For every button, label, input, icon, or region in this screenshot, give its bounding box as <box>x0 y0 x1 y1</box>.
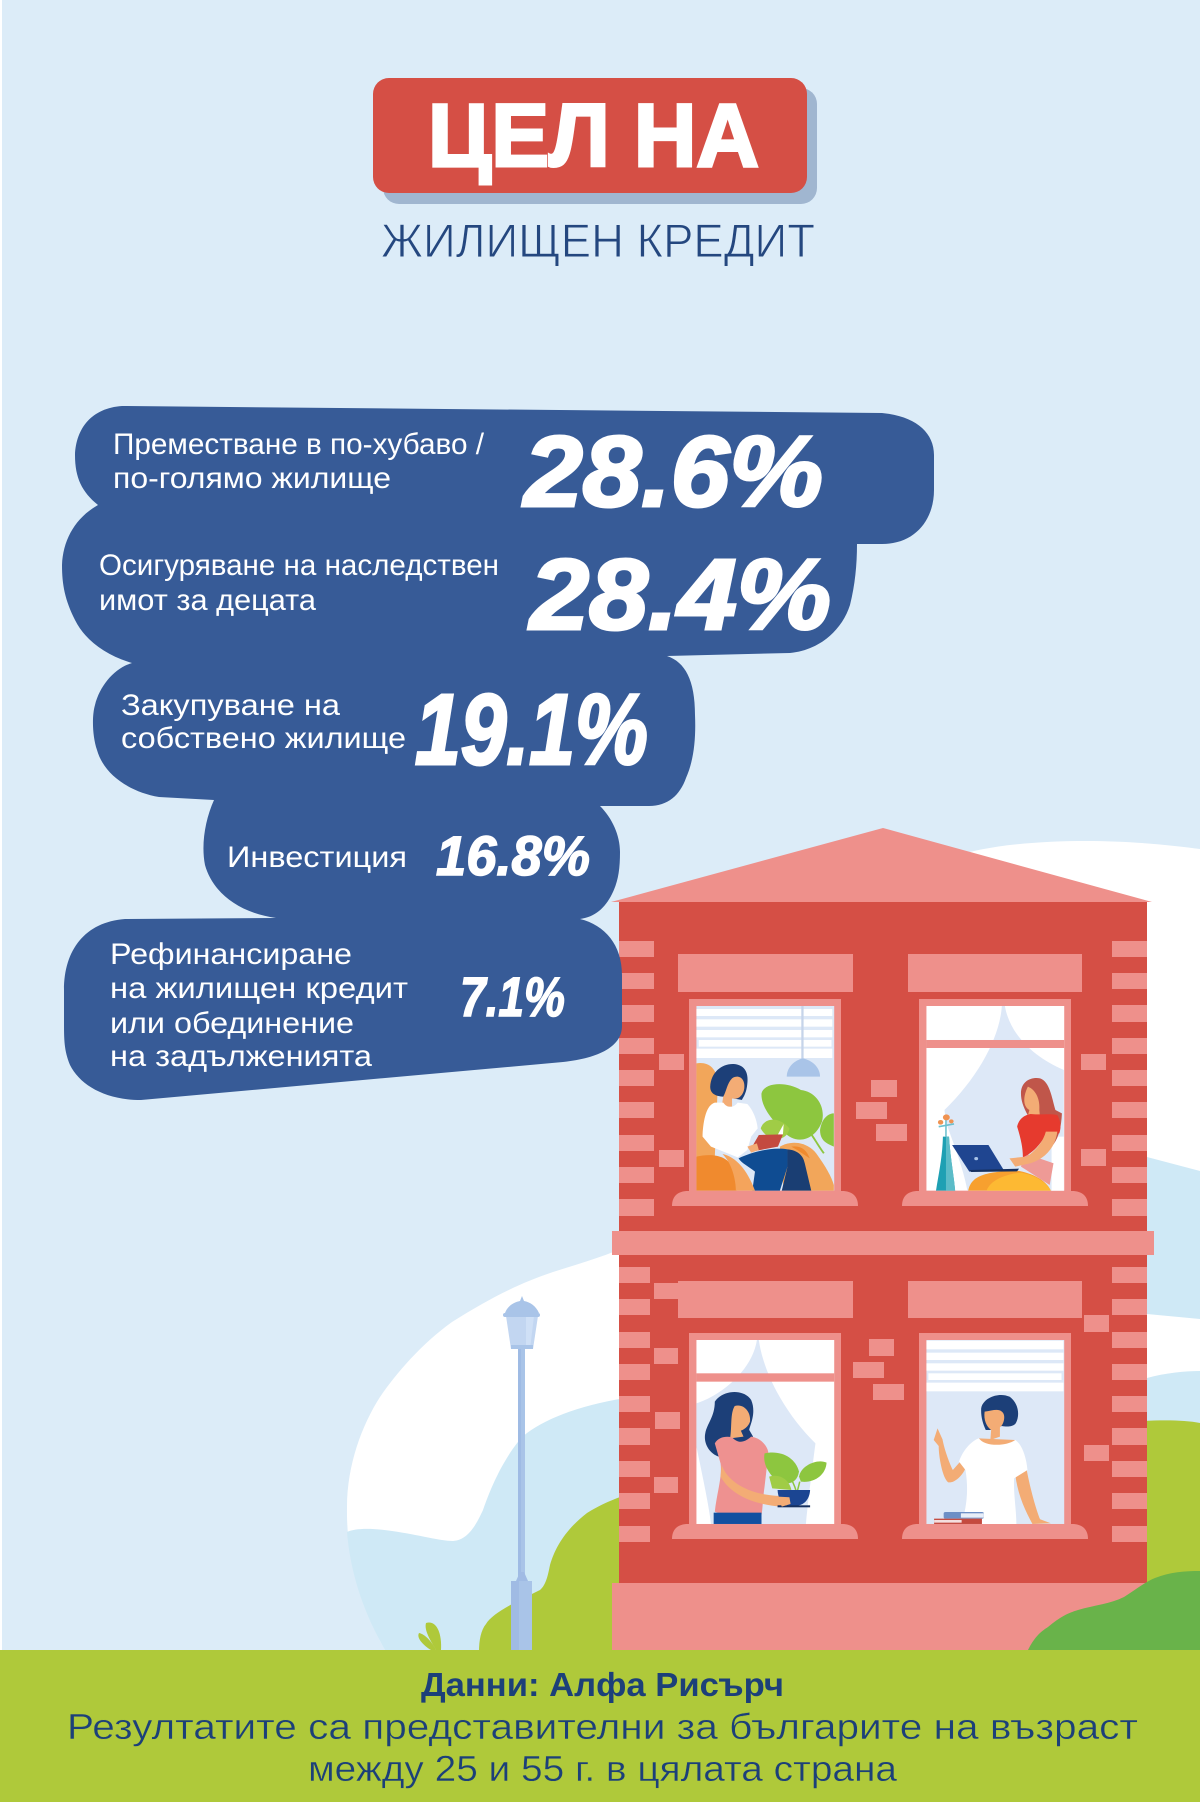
footer <box>0 1650 1200 1802</box>
dark green bush, right <box>1028 1571 1200 1650</box>
neck chest <box>979 1438 1015 1450</box>
note line 1: Резултатите са представителни за българите на възраст <box>67 1706 1138 1747</box>
title text: ЦЕЛ НА <box>428 85 759 185</box>
legs <box>739 1149 788 1191</box>
window frames <box>689 999 841 1194</box>
window: woman reading in armchair <box>696 1006 834 1191</box>
armchair <box>696 1063 718 1157</box>
plant <box>764 1452 799 1483</box>
light blue field, left <box>347 1396 640 1650</box>
sills <box>672 1191 858 1206</box>
transom <box>926 1040 1064 1048</box>
item 3: Закупуване на <box>121 689 340 722</box>
badge shadow <box>383 88 817 204</box>
lime hill, right <box>1100 1420 1200 1660</box>
item 3: 19.1% <box>415 674 648 786</box>
roof <box>611 828 1152 902</box>
light blue band, right <box>1100 1150 1200 1319</box>
wall <box>619 902 1147 1583</box>
face <box>730 1405 750 1438</box>
blinds <box>926 1341 1063 1391</box>
item 2: Осигуряване на наследствен <box>99 549 499 582</box>
item 1 <box>113 416 823 528</box>
lamp <box>787 1058 820 1077</box>
badge <box>373 78 807 193</box>
books <box>944 1512 984 1519</box>
lime hill, left <box>479 1490 640 1652</box>
arm waving <box>934 1428 965 1482</box>
bricks <box>619 941 1147 1542</box>
shirt <box>1017 1114 1060 1157</box>
panel: loan purposes <box>62 406 934 1100</box>
item 5 <box>110 938 565 1073</box>
book <box>751 1134 783 1152</box>
hair <box>981 1395 1018 1430</box>
plant <box>761 1084 823 1140</box>
building <box>611 828 1172 1650</box>
hair <box>710 1064 748 1100</box>
item 5: 7.1% <box>460 965 565 1028</box>
white cloud behind building, right <box>950 841 1200 1400</box>
shirt <box>959 1438 1027 1524</box>
item 1: 28.6% <box>522 416 823 528</box>
item 5: Рефинансиране <box>110 938 352 971</box>
item 3 <box>121 674 648 786</box>
vase <box>936 1137 955 1191</box>
hair <box>705 1392 753 1457</box>
blinds <box>696 1009 832 1058</box>
plinth <box>612 1583 1172 1650</box>
item 4 <box>227 824 590 887</box>
arm right <box>1015 1470 1051 1524</box>
legs <box>968 1171 1051 1191</box>
white cloud behind building, left <box>347 1235 700 1650</box>
face <box>1024 1087 1040 1120</box>
item 5: на жилищен кредит <box>110 972 408 1005</box>
item 4: Инвестиция <box>227 841 407 874</box>
blue stacked shape <box>62 406 934 1100</box>
street lamp <box>503 1296 540 1650</box>
item 1: по-голямо жилище <box>113 462 391 495</box>
shirt <box>703 1103 758 1157</box>
curtain <box>696 1340 815 1524</box>
item 2: 28.4% <box>528 539 831 651</box>
face <box>984 1410 1004 1440</box>
subtitle: ЖИЛИЩЕН КРЕДИТ <box>381 214 815 267</box>
arm <box>721 1465 791 1507</box>
window: woman with potted plant <box>696 1340 834 1524</box>
lintels <box>678 954 853 992</box>
transom <box>696 1373 834 1382</box>
light blue band lower, right <box>1100 1371 1200 1500</box>
curtain <box>944 1006 1064 1191</box>
shirt <box>715 1437 768 1517</box>
window: woman with laptop <box>926 1006 1064 1191</box>
title badge <box>373 78 817 204</box>
item 5: или обединение <box>110 1007 354 1040</box>
note line 2: между 25 и 55 г. в цялата страна <box>308 1748 898 1789</box>
chair front <box>696 1155 737 1191</box>
window: woman waving <box>926 1340 1064 1524</box>
small plant at ground <box>418 1623 441 1650</box>
hair <box>1021 1078 1062 1150</box>
flowers <box>944 1120 948 1137</box>
item 1: Преместване в по-хубаво / <box>113 428 485 461</box>
laptop <box>952 1145 1004 1172</box>
item 3: собствено жилище <box>121 722 406 755</box>
item 2 <box>99 539 831 651</box>
item 2: имот за децата <box>99 584 316 617</box>
arm <box>1009 1132 1057 1167</box>
item 5: на задълженията <box>110 1040 372 1073</box>
jeans <box>714 1513 761 1524</box>
source: Данни: Алфа Рисърч <box>421 1666 784 1703</box>
ground band <box>0 1650 1200 1802</box>
face <box>722 1077 744 1107</box>
item 4: 16.8% <box>436 824 590 887</box>
lower body <box>1021 1153 1053 1185</box>
pot <box>778 1490 810 1506</box>
middle band <box>612 1231 1154 1255</box>
